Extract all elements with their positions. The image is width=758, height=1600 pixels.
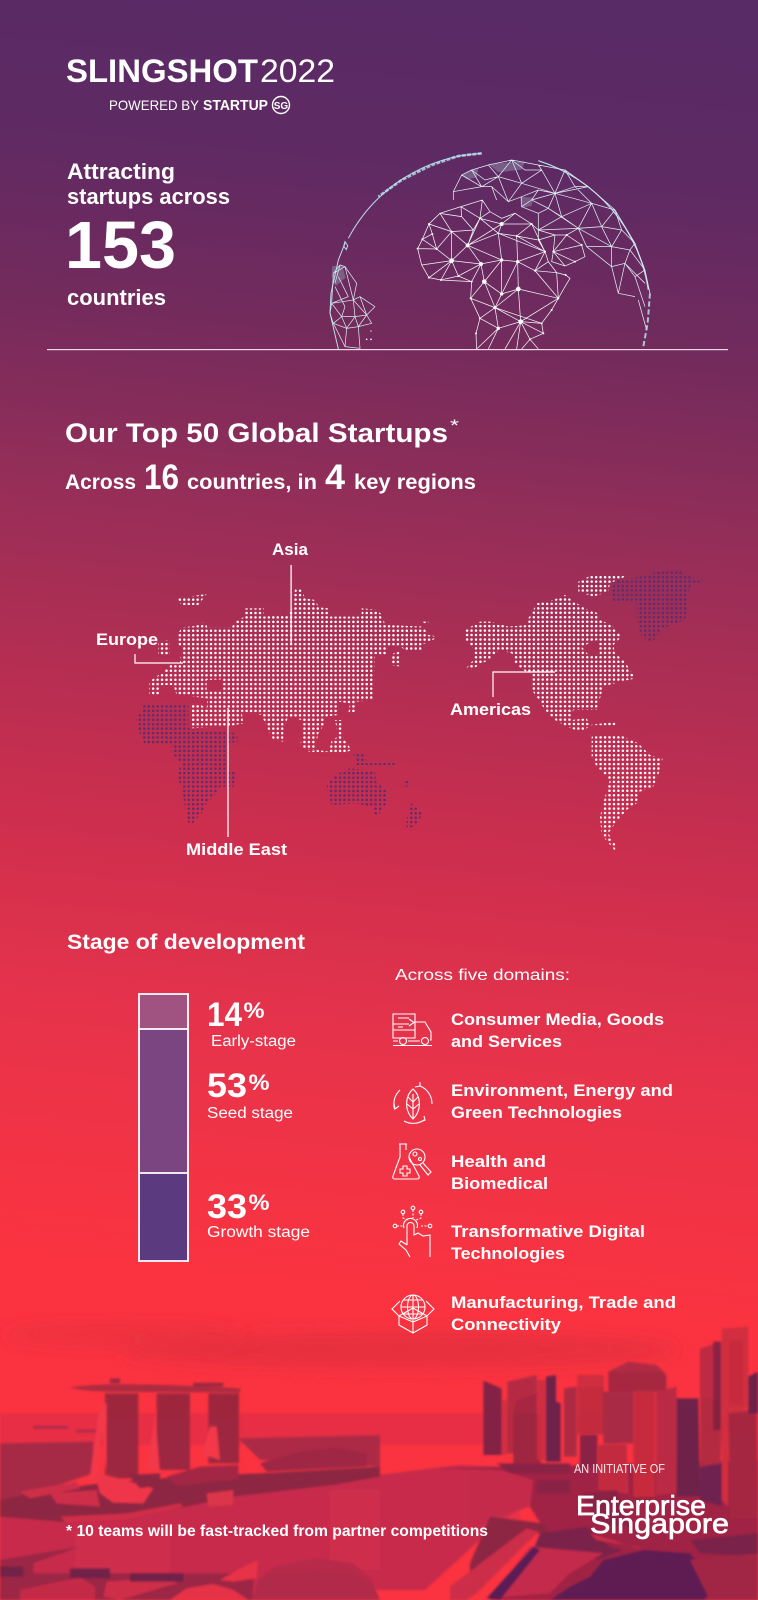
- North and South America dots: [466, 576, 663, 850]
- nodes: [366, 217, 583, 340]
- subheading: 16 countries in 4 key regions: key regions: [354, 471, 476, 494]
- logo: Slingshot 2022: POWERED BY: [109, 97, 200, 113]
- globe network: [330, 153, 650, 349]
- region label: Middle East: Middle East: [186, 841, 288, 859]
- region label: Europe: [96, 631, 183, 663]
- stat: seed stage 53%: [207, 1067, 293, 1122]
- logo: Slingshot 2022: STARTUP: [203, 97, 268, 114]
- logo: Enterprise Singapore: Enterprise: [576, 1490, 706, 1521]
- domain: digital: Transformative Digital: [451, 1223, 645, 1241]
- region label: Asia: Asia: [272, 541, 309, 559]
- domain: environment: [451, 1082, 673, 1122]
- subheading: 16 countries in 4 key regions: [65, 458, 476, 497]
- domain list: [451, 1011, 676, 1334]
- domain: health: Health and: [451, 1153, 546, 1171]
- footnote: * 10 teams will be fast-tracked from partner competitions: [66, 1523, 488, 1540]
- headline: attracting startups across 153 countries: [65, 159, 230, 310]
- logo: Slingshot 2022: SG: [274, 101, 288, 112]
- stat: growth stage 33%: [207, 1188, 310, 1241]
- stat: early-stage 14%: Early-stage: [211, 1033, 296, 1050]
- logo: Enterprise Singapore: Singapore: [590, 1508, 729, 1539]
- stat: seed stage 53%: %: [248, 1070, 270, 1095]
- stat: growth stage 33%: %: [248, 1190, 270, 1215]
- subheading: 16 countries in 4 key regions: 4: [325, 458, 346, 497]
- headline: attracting startups across 153 countries: Attracting: [67, 159, 175, 184]
- stat: early-stage 14%: %: [244, 998, 264, 1023]
- heading: stage of development: Stage of development: [67, 931, 305, 954]
- heading: top 50 global startups: *: [450, 416, 460, 435]
- stat: growth stage 33%: 33: [207, 1188, 247, 1226]
- icon: flask and magnifier: [393, 1144, 431, 1179]
- stat: early-stage 14%: [207, 996, 296, 1050]
- heading: top 50 global startups: Our Top 50 Global Startups: [65, 418, 448, 448]
- Europe and Asia mesh: [453, 160, 650, 330]
- stat: growth stage 33%: Growth stage: [207, 1224, 310, 1241]
- South America mesh: [330, 265, 375, 348]
- dotted map: Africa, Asia, Europe, Oceania: [136, 590, 438, 828]
- Greenland dots: [610, 572, 703, 641]
- region label: Americas: [450, 672, 555, 719]
- stat: seed stage 53%: Seed stage: [207, 1105, 293, 1122]
- stacked bar chart: stage of development: [139, 994, 188, 1261]
- logo: Enterprise Singapore: AN INITIATIVE OF: [574, 1462, 665, 1476]
- globe rim: [330, 153, 650, 349]
- dotted map: Americas and Greenland: [466, 572, 703, 850]
- subheading: 16 countries in 4 key regions: 16: [144, 458, 179, 497]
- domain: manufacturing: [451, 1294, 676, 1334]
- logo: Enterprise Singapore: [574, 1462, 729, 1539]
- Africa mesh: [418, 200, 570, 349]
- Africa and Oceania dots: [136, 703, 424, 828]
- icon: pointing finger with nodes: [393, 1206, 432, 1257]
- heading: across five domains: Across five domains:: [395, 967, 570, 984]
- region label: Americas: Americas: [450, 701, 531, 719]
- stat: early-stage 14%: 14: [207, 996, 242, 1034]
- icon: recycling leaf: [394, 1082, 432, 1123]
- stat: seed stage 53%: 53: [207, 1067, 247, 1105]
- domain: consumer media: [451, 1011, 664, 1051]
- headline: attracting startups across 153 countries: countries: [67, 285, 166, 310]
- domain: health: [451, 1153, 548, 1193]
- domain: health: Biomedical: [451, 1175, 548, 1193]
- icon: delivery truck: [393, 1014, 432, 1046]
- region label: Asia: [272, 541, 309, 645]
- region label: Europe: Europe: [96, 631, 158, 649]
- subheading: 16 countries in 4 key regions: Across: [65, 471, 136, 494]
- logo: Slingshot 2022: [66, 53, 335, 114]
- domain: manufacturing: Manufacturing, Trade and: [451, 1294, 676, 1312]
- domain: consumer media: and Services: [451, 1033, 562, 1051]
- domain: digital: [451, 1223, 645, 1263]
- icon: globe in box: [392, 1295, 434, 1333]
- logo: Slingshot 2022: SLINGSHOT: [66, 53, 258, 89]
- logo: Slingshot 2022: 2022: [260, 53, 335, 89]
- domain: consumer media: Consumer Media, Goods: [451, 1011, 664, 1029]
- headline: attracting startups across 153 countries: startups across: [67, 184, 230, 209]
- domain: digital: Technologies: [451, 1245, 565, 1263]
- domain: environment: Environment, Energy and: [451, 1082, 673, 1100]
- domain: environment: Green Technologies: [451, 1104, 622, 1122]
- Arabia mesh: [538, 228, 585, 266]
- city skyline photo: [0, 1323, 758, 1600]
- Eurasia dots: [149, 590, 438, 752]
- domain: manufacturing: Connectivity: [451, 1316, 562, 1334]
- subheading: 16 countries in 4 key regions: countries, in: [187, 471, 317, 494]
- divider line: [47, 349, 728, 350]
- headline: attracting startups across 153 countries: 153: [65, 208, 176, 283]
